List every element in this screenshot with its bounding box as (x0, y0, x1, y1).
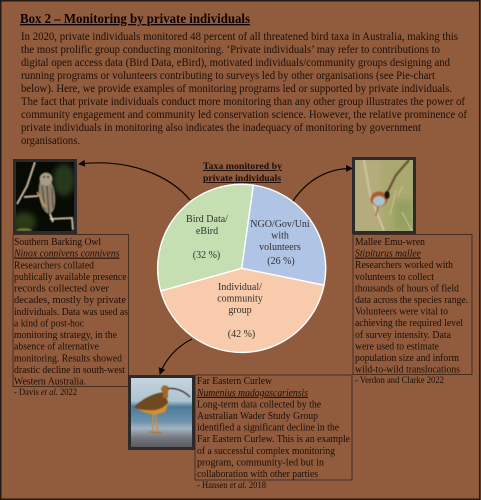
text block: introduction: below). Here, we provide examples of monitoring programs led or supported by private individuals. (21, 81, 452, 95)
description: a kind of post-hoc (14, 318, 84, 330)
chart heading: Taxa monitored by (203, 161, 282, 172)
description: Researchers worked with (355, 259, 454, 271)
description: monitoring strategy, in the (14, 329, 117, 341)
species name: Southern Barking Owl (14, 236, 101, 248)
arrow: pie to owl (79, 163, 190, 200)
arrow: pie to emu-wren (293, 168, 352, 201)
pie slice: Individual/community group (161, 268, 324, 352)
pie slice: Bird Data/eBird: Bird Data/ (186, 214, 228, 225)
pie slice: NGO/Gov/Uni with volunteers: NGO/Gov/Uni (250, 219, 310, 230)
description: wild-to-wild translocations (355, 364, 460, 376)
text block: introduction (21, 29, 467, 147)
description: collaboration with other parties (197, 468, 318, 480)
description: volunteers to collect (355, 271, 434, 283)
chart heading (203, 161, 282, 184)
description: drastic decline in south-west (14, 364, 125, 376)
scientific name: Stipiturus mallee (355, 248, 421, 260)
description: Australian Wader Study Group (197, 410, 318, 422)
pie slice: Individual/community group: Individual/ (218, 282, 262, 293)
scientific name: Numenius madagascariensis (196, 387, 308, 399)
panel: Mallee Emu-wren (353, 234, 472, 376)
description: were used to estimate (355, 340, 439, 352)
description: of survey intensity. Data (355, 329, 451, 341)
description (355, 259, 468, 376)
description: identified a significant decline in the (197, 422, 339, 434)
description: monitoring. Results showed (14, 352, 123, 364)
description: of a successful complex monitoring (197, 445, 336, 457)
text block: introduction: organisations. (21, 133, 80, 147)
pie slice: NGO/Gov/Uni with volunteers: with (271, 230, 289, 242)
pie slice: NGO/Gov/Uni with volunteers: volunteers (259, 242, 301, 253)
description: decades, mostly by private (14, 294, 126, 306)
arrow: pie to curlew (160, 339, 192, 374)
pie slice: Bird Data/eBird (158, 184, 253, 291)
description: Western Australia. (14, 376, 86, 388)
pie slice: Individual/community group: community (217, 294, 263, 304)
pie slice: Bird Data/eBird: eBird (196, 226, 218, 237)
text block: introduction: the most prolific group conducting monitoring. ‘Private individuals’ may refer to contributions to (21, 42, 440, 56)
description: data across the species range. (355, 294, 468, 306)
description: publically available presence (14, 271, 127, 283)
reference: Davis: - Davis et al. 2022 (14, 387, 77, 397)
description: Volunteers were vital to (355, 306, 448, 318)
reference: Hansen: - Hansen et al. 2018 (197, 480, 266, 490)
pie slice: Individual/community group: group (228, 305, 252, 316)
description: program, community-led but in (197, 456, 325, 468)
pie slice: Individual/community group: (42 %) (228, 329, 255, 340)
icon: curlew photo (130, 376, 194, 448)
description: Far Eastern Curlew. This is an example (197, 433, 350, 445)
pie slice: NGO/Gov/Uni with volunteers (242, 185, 326, 285)
description: individuals. Data was used as (14, 306, 128, 318)
description: Long-term data collected by the (197, 398, 321, 410)
text block: introduction: running programs or volunteers contributing to surveys led by other organisations (see Pie-chart (21, 68, 436, 82)
description: thousands of hours of field (355, 282, 460, 294)
description: records collected over (14, 283, 109, 295)
description: population size and inform (355, 352, 460, 364)
pie chart (158, 184, 326, 352)
text block: introduction: private individuals in monitoring also indicates the inadequacy of monitoring by government (21, 120, 422, 134)
reference: Verdon and Clarke: - Verdon and Clarke 2022 (355, 375, 444, 385)
species name: Far Eastern Curlew (197, 375, 272, 387)
icon: owl photo (12, 160, 76, 232)
pie slice: Bird Data/eBird: (32 %) (193, 250, 220, 261)
description (14, 259, 128, 388)
description (197, 398, 350, 480)
chart heading: private individuals (203, 173, 281, 184)
text block: introduction: digital open access data (Bird Data, eBird), motivated individuals/community groups designing and (21, 55, 450, 69)
description: absence of alternative (14, 341, 99, 353)
species name: Mallee Emu-wren (355, 236, 426, 248)
pie slice: NGO/Gov/Uni with volunteers: (26 %) (267, 256, 295, 267)
heading: Box 2 – Monitoring by private individuals (20, 11, 250, 26)
scientific name: Ninox connivens connivens (13, 248, 120, 260)
panel: Far Eastern Curlew (195, 375, 352, 480)
panel: Southern Barking Owl (13, 234, 128, 388)
description: achieving the required level (355, 317, 463, 329)
icon: emu-wren photo (354, 158, 414, 232)
description: Researchers collated (14, 259, 95, 271)
